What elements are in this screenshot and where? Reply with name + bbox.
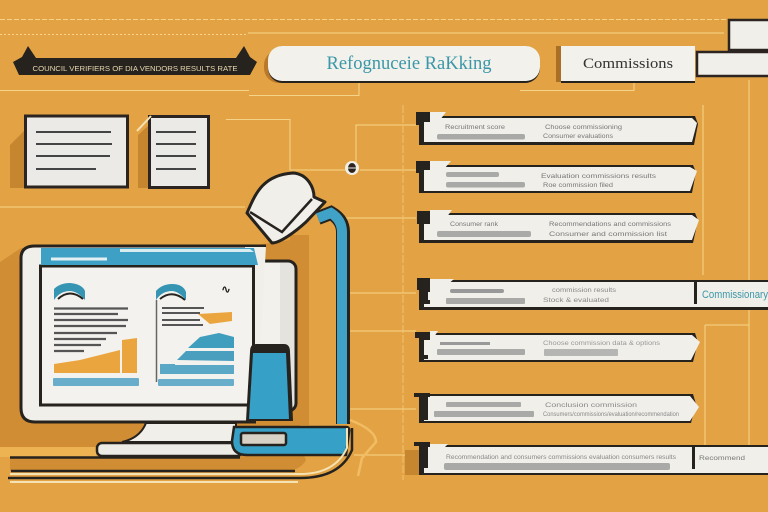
row 7 — [405, 442, 768, 475]
left chart — [53, 283, 139, 386]
title pill — [264, 46, 540, 83]
row 2: Roe commission filed — [543, 183, 613, 189]
row 4 text — [450, 289, 504, 293]
base cables — [8, 420, 376, 482]
row 3: Consumer and commission list — [549, 232, 667, 238]
row 6: Consumers/commissions/evaluation/recommendation — [543, 412, 679, 418]
row 4: Stock & evaluated — [543, 298, 609, 304]
row 6 — [414, 393, 699, 423]
monitor shadow — [0, 235, 309, 447]
document panel 2 — [137, 116, 208, 188]
row 3 text: Consumer rank — [450, 222, 499, 228]
row 7 label: Recommend — [699, 455, 745, 462]
row 6: Conclusion commission — [545, 403, 637, 409]
row 1: Choose commissioning — [545, 125, 622, 131]
squiggle icon: ∿ — [221, 284, 231, 296]
row 5: Choose commission data & options — [543, 340, 661, 347]
lamp arm — [318, 213, 343, 424]
row 6 text — [446, 402, 521, 407]
row 2 text — [446, 172, 499, 177]
screen header — [41, 248, 258, 265]
commissions box — [556, 46, 695, 83]
row 1 — [416, 112, 698, 145]
row 3: Recommendations and commissions — [549, 222, 671, 228]
document panel 1 — [10, 116, 128, 188]
row 5 — [415, 331, 700, 362]
lamp base — [232, 427, 349, 455]
row 4: commission results — [552, 288, 616, 294]
row 1: Consumer evaluations — [543, 134, 613, 140]
right chart — [156, 284, 234, 386]
lamp head — [247, 173, 325, 243]
row 7 text: Recommendation and consumers commissions evaluation consumers results — [446, 454, 677, 461]
row 1 text: Recruitment score — [445, 125, 506, 131]
title text: Refognuceie RaKking — [326, 53, 492, 74]
commissions label: Commissions — [583, 56, 673, 72]
monitor — [21, 246, 296, 422]
banner — [13, 46, 257, 75]
device cylinder — [246, 344, 293, 421]
monitor back panel — [250, 261, 296, 411]
row 3 — [417, 210, 699, 243]
row 5 text — [440, 342, 490, 345]
row 2 — [416, 161, 697, 193]
row 4 — [417, 278, 768, 310]
top right boxes — [697, 20, 768, 76]
connector node — [345, 161, 359, 175]
screen — [40, 266, 254, 405]
banner text: COUNCIL VERIFIERS OF DIA VENDORS RESULTS RATE — [32, 64, 238, 73]
monitor stand — [97, 423, 242, 456]
row 2: Evaluation commissions results — [541, 174, 656, 180]
monitor bezel — [21, 246, 266, 422]
